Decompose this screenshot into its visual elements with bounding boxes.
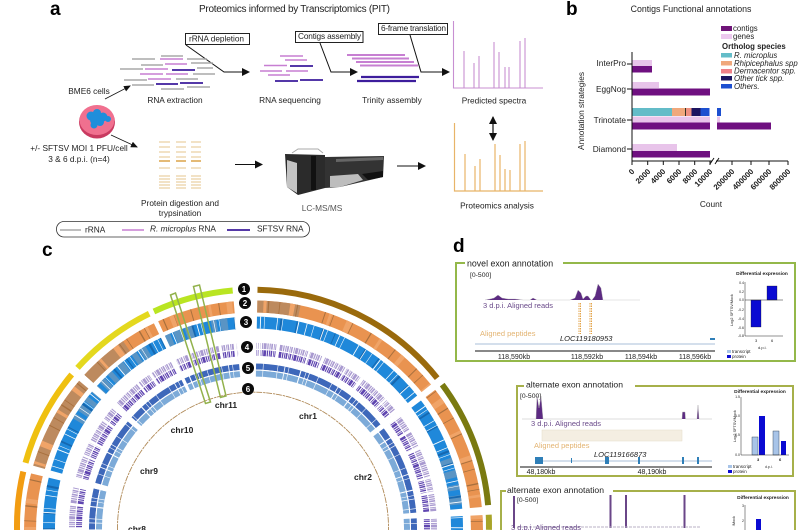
card: novel exon annotation: Aligned peptides (480, 329, 536, 338)
label: protein digestion: trypsination (159, 208, 202, 218)
arrow: contigs to trinity (320, 43, 357, 72)
track number markers: 6 (246, 385, 251, 394)
title: contigs functional annotations: Contigs Functional annotations (631, 4, 752, 14)
x axis tick labels: 200000 (712, 167, 737, 192)
arrow: compare spectra (492, 117, 494, 140)
differential expression chart: -0.6 (738, 326, 744, 330)
y axis labels (593, 58, 626, 154)
arrow: depletion to sequencing (186, 45, 249, 72)
track 5 bar breaks (96, 370, 411, 530)
arrow: LC-MS to analysis (397, 165, 425, 167)
label: infection conditions: 3 & 6 d.p.i. (n=4) (48, 154, 110, 164)
label: proteomics analysis: Proteomics analysis (460, 200, 534, 210)
card: alternate exon annotation 1: [0-500] (520, 393, 541, 400)
track 5: blue peptide tracks (92, 366, 414, 530)
chromosome labels: chr10 (171, 425, 194, 435)
reads coverage (485, 284, 640, 300)
chart: predicted spectra (454, 21, 543, 88)
differential expression chart: /Mock (732, 516, 736, 526)
differential expression chart: Log2 SFTSV/Mock (733, 410, 737, 442)
differential expression chart: 3 (757, 457, 760, 462)
label: protein digestion: Protein digestion and (141, 198, 219, 208)
card: alternate exon annotation 2 (501, 485, 795, 530)
label: predicted spectra: Predicted spectra (462, 96, 527, 106)
x axis title: Count (700, 199, 723, 209)
x axis tick labels (627, 167, 793, 192)
track 4: purple peptide tracks (72, 346, 434, 530)
differential expression chart: Differential expression (737, 495, 789, 501)
label: protein digestion (141, 198, 219, 218)
differential expression chart: 0.5 (735, 433, 740, 437)
card: alternate exon annotation 1 (517, 380, 793, 476)
arrow: translation to spectra (410, 35, 449, 72)
label: RNA sequencing: RNA sequencing (259, 95, 321, 105)
heading: alternate exon annotation (526, 380, 623, 390)
differential expression chart: 1.5 (735, 395, 740, 399)
legend: annotation bars and ortholog species: Others. (734, 82, 760, 91)
differential expression chart: transcript (733, 464, 752, 469)
legend: annotation bars and ortholog species: Rhipicephalus spp (734, 59, 798, 68)
x axis tick labels: 400000 (731, 167, 756, 192)
panel: b contigs functional annotations (566, 0, 798, 209)
chromosome labels: chr2 (354, 472, 372, 482)
sector gaps (60, 334, 446, 530)
gene model and coordinates (535, 460, 712, 462)
track number markers: 4 (245, 343, 250, 352)
legend: annotation bars and ortholog species: Other tick spp. (734, 74, 784, 83)
card: novel exon annotation: 3 d.p.i. Aligned reads (483, 301, 553, 310)
icon: cell culture dish (79, 105, 115, 138)
differential expression chart: 3 (755, 338, 758, 343)
bar chart: annotation counts (576, 52, 793, 209)
differential expression chart: 0.0 (739, 298, 744, 302)
x axis tick labels: 2000 (634, 167, 653, 186)
legend: annotation bars and ortholog species: Ortholog species (722, 42, 786, 51)
chromosome labels: chr9 (140, 466, 158, 476)
chart: proteomics spectra (454, 123, 543, 191)
legend: annotation bars and ortholog species: R. microplus (734, 51, 777, 60)
reads: RNA sequencing (260, 56, 323, 81)
y axis labels: Trinotate (594, 115, 626, 125)
legend: RNA types: SFTSV RNA (257, 224, 304, 234)
card: alternate exon annotation 1: Aligned peptides (534, 441, 590, 450)
differential expression chart: -0.8 (738, 334, 744, 338)
panel label c: c (42, 240, 53, 261)
gene model and coordinates (475, 343, 715, 345)
aligned peptide band (542, 430, 682, 441)
panel: d exon annotation tracks (453, 236, 795, 530)
differential expression chart: 6 (779, 457, 782, 462)
panel: a proteomics workflow (30, 0, 543, 237)
track 4 bar breaks (75, 349, 430, 530)
track number markers: 1 (242, 285, 247, 294)
differential expression chart (732, 495, 789, 530)
arrow: dish to digestion (111, 135, 137, 147)
differential expression chart: 3 (742, 504, 744, 508)
card: novel exon annotation: 118,596kb (679, 354, 711, 361)
label: LC-MS/MS: LC-MS/MS (302, 203, 343, 213)
reads coverage (514, 495, 685, 528)
differential expression chart: protein (733, 469, 747, 474)
differential expression chart: -0.4 (738, 317, 744, 321)
x axis tick labels: 8000 (681, 167, 700, 186)
legend: RNA types (56, 222, 310, 237)
differential expression chart: transcript (732, 349, 751, 354)
differential expression chart (728, 389, 789, 474)
differential expression chart: Differential expression (734, 389, 786, 395)
differential expression chart: Log2 SFTSV/Mock (730, 294, 734, 326)
differential expression chart: 0.0 (735, 453, 740, 457)
gel: protein bands (159, 142, 201, 188)
legend: annotation bars and ortholog species: contigs (733, 24, 758, 33)
heading: novel exon annotation (467, 258, 553, 268)
contigs: Trinity assembly (347, 55, 419, 81)
box: 6-frame translation: 6-frame translation (381, 23, 446, 33)
label: Trinity assembly: Trinity assembly (362, 95, 423, 105)
y axis labels: EggNog (596, 84, 626, 94)
track 3: blue density (49, 323, 457, 530)
card: alternate exon annotation 2: [0-500] (517, 497, 538, 504)
bars: Trinotate (632, 108, 771, 130)
differential expression chart: 6 (771, 338, 774, 343)
legend: annotation bars and ortholog species: genes (733, 32, 754, 41)
label: BME6 cells: BME6 cells (68, 86, 110, 96)
differential expression chart: 2 (742, 519, 744, 523)
panel label d: d (453, 236, 465, 257)
card: novel exon annotation: 118,590kb (498, 354, 530, 361)
legend: RNA types: rRNA (85, 224, 106, 234)
differential expression chart: d.p.i. (758, 345, 767, 350)
arrow: cells to RNA extraction (105, 86, 130, 99)
differential expression chart: 1.0 (735, 414, 740, 418)
track number markers (238, 283, 254, 395)
y axis title: Annotation strategies (576, 72, 586, 150)
card: novel exon annotation (456, 258, 795, 361)
chromosome labels (128, 400, 372, 530)
arrow: digestion to LC-MS (235, 164, 262, 166)
card: novel exon annotation: 118,594kb (625, 354, 657, 361)
differential expression chart: 0.2 (739, 290, 744, 294)
card: alternate exon annotation 1: 3 d.p.i. Aligned reads (531, 419, 601, 428)
y axis labels: Diamond (593, 144, 626, 154)
track 6: scatter ring (118, 392, 388, 530)
card: alternate exon annotation 1: 48,180kb (527, 469, 556, 476)
chromosome labels: chr11 (215, 400, 237, 410)
track 1: chromosome ideogram (17, 290, 489, 530)
legend: annotation bars and ortholog species: Dermacentor spp. (734, 66, 796, 76)
card: alternate exon annotation 1: LOC119166873 (594, 450, 647, 459)
track number markers: 2 (243, 299, 248, 308)
highlight: chr11 region boxes (170, 285, 226, 404)
panel: c circular genome plot (17, 240, 489, 530)
card: novel exon annotation: LOC119180953 (560, 334, 613, 343)
card: novel exon annotation: [0-500] (470, 272, 491, 279)
card: novel exon annotation: 118,592kb (571, 354, 603, 361)
track number markers: 3 (244, 318, 249, 327)
axes (627, 52, 788, 165)
differential expression chart: 0.4 (739, 281, 744, 285)
label: infection conditions: +/- SFTSV MOI 1 PFU/cell (30, 143, 128, 153)
differential expression chart: Differential expression (736, 271, 788, 277)
bars: Diamond (632, 144, 710, 158)
reads coverage (522, 396, 712, 419)
bars: EggNog (632, 82, 710, 96)
track number markers: 5 (246, 364, 251, 373)
differential expression chart: -0.2 (738, 308, 744, 312)
box: contigs assembly: Contigs assembly (298, 31, 362, 41)
label: RNA extraction: RNA extraction (147, 95, 203, 105)
x axis tick labels: 0 (627, 167, 637, 176)
legend: RNA types: R. microplus RNA (150, 224, 216, 234)
heading: alternate exon annotation (507, 485, 604, 495)
differential expression chart: protein (732, 354, 746, 359)
circos tracks (17, 290, 489, 530)
reads: RNA extraction (120, 56, 215, 89)
track 2: orange density (30, 307, 477, 530)
x axis tick labels: 4000 (649, 167, 668, 186)
chromosome labels: chr1 (299, 411, 317, 421)
aligned peptide marks (579, 303, 592, 334)
y axis labels: InterPro (596, 58, 626, 68)
box: rRNA depletion: rRNA depletion (189, 34, 244, 44)
card: alternate exon annotation 1: 48,190kb (638, 469, 667, 476)
bars: InterPro (632, 60, 652, 72)
differential expression chart: d.p.i. (765, 465, 773, 469)
x axis tick labels: 800000 (768, 167, 793, 192)
label: infection conditions (30, 143, 128, 164)
legend: annotation bars and ortholog species (721, 24, 798, 91)
x axis tick labels: 600000 (749, 167, 774, 192)
x axis tick labels: 10000 (693, 167, 715, 189)
icon: LC-MS/MS instrument (285, 149, 384, 195)
title: proteomics informed by transcriptomics: Proteomics informed by Transcriptomics (PIT) (199, 4, 390, 15)
x axis tick labels: 6000 (665, 167, 684, 186)
differential expression chart (727, 271, 788, 359)
